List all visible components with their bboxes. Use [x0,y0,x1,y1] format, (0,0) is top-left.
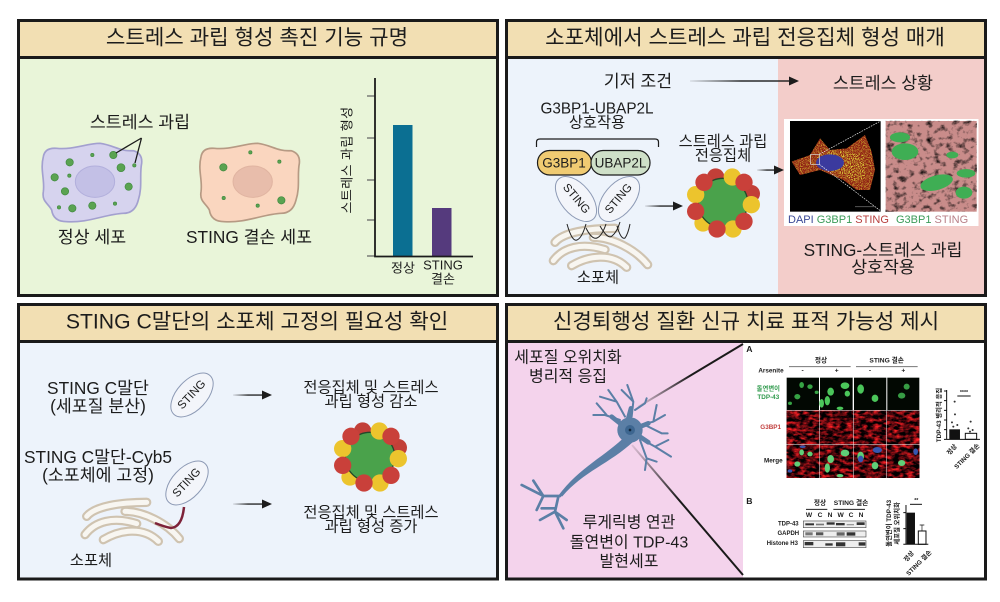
label: ALS mutant TDP-43 cells [570,514,688,570]
label: STING-deficient cell: STING 결손 세포 [186,227,312,247]
label: STING C-terminus cytosolic: (세포질 분산) [50,396,146,416]
arrow: lower [233,500,272,508]
label: pre-condensate: 스트레스 과립 [679,134,767,150]
heading: panel 1: 스트레스 과립 형성 촉진 기능 규명 [106,26,408,50]
icon: STING dimer: STING [560,182,592,216]
icon: anchored STING on ER: STING [171,466,203,500]
heading: panel 4 [506,304,986,342]
bar chart: stress granule formation: 정상 [391,260,415,276]
heading: panel 2 [506,20,986,58]
icon: anchored STING on ER [85,453,216,541]
bar chart: stress granule formation: 결손 [431,272,455,286]
label: ALS mutant TDP-43 cells: 돌연변이 TDP-43 [570,534,688,552]
label: cytoplasmic mislocalization: 병리적 응집 [529,368,607,386]
label: STING-stress granule interaction: STING-스트레스 과립 [804,240,962,260]
label: G3BP1-UBAP2L interaction: G3BP1-UBAP2L [540,100,654,118]
callout: stress granule pointer [90,112,190,163]
figure B: western blot: TDP-43 [778,521,799,527]
label: Cyb5 anchored: STING C말단-Cyb5 [24,447,172,467]
chart: cytoplasmic mislocalization [884,498,933,577]
label: ALS mutant TDP-43 cells: 발현세포 [600,552,658,570]
icon: STING ellipse: STING [176,378,208,412]
figure B: western blot: C [849,512,854,519]
heading: panel 1 [18,20,498,58]
arrow: dimer to condensate [645,202,683,210]
figure B: western blot: 정상 [814,498,826,507]
figure A: microscopy grid: 돌연변이 [757,383,780,392]
bar chart: stress granule formation [340,78,473,286]
icon: neuron [522,385,671,528]
label: ALS mutant TDP-43 cells: 루게릭병 연관 [583,514,676,532]
chart: TDP-43 aggregates: TDP-43 병리적 응집 [934,388,943,442]
label: cytoplasmic mislocalization [514,348,622,386]
arrow: condensate to image [757,166,784,174]
icon: ER membrane with anchors [553,222,648,267]
chart: TDP-43 aggregates: **** [960,390,969,396]
figure A: microscopy grid: STING 결손 [869,355,904,364]
figure A and B [746,344,981,577]
bar chart: stress granule formation: STING [423,258,463,272]
figure B: western blot: N [859,512,864,519]
figure B: western blot: C [818,512,823,519]
label: G3BP1-UBAP2L interaction [540,100,654,132]
label: STING C-terminus cytosolic: STING C말단 [47,378,149,398]
icon: G3BP1 and UBAP2L pills: UBAP2L [595,156,647,170]
chart: TDP-43 aggregates: STING 결손 [952,441,981,471]
label: pre-condensate: 전응집체 [695,148,751,164]
label: decreased formation: 전응집체 및 스트레스 [303,380,439,396]
chart: TDP-43 aggregates: 정상 [944,442,959,457]
icon: STING dimer [547,169,648,229]
label: STING-stress granule interaction [804,240,962,277]
heading: panel 3: STING C말단의 소포체 고정의 필요성 확인 [66,310,448,334]
figure B: western blot: N [828,512,833,519]
label: increased formation [303,504,439,536]
callout: stress granule pointer: 스트레스 과립 [90,112,190,132]
figure A: microscopy grid: Merge [764,457,783,464]
label: Cyb5 anchored [24,447,172,485]
chart: cytoplasmic mislocalization: STING 결손 [904,548,933,577]
label: STING C-terminus cytosolic [47,378,149,416]
figure B: western blot: GAPDH [778,531,799,537]
icon: STING dimer: STING [603,182,635,216]
chart: TDP-43 aggregates [934,388,981,471]
icon: G3BP1 and UBAP2L pills: G3BP1 [542,156,586,170]
panel: C-terminal ER anchoring [18,304,498,579]
label: increased formation: 전응집체 및 스트레스 [303,504,439,522]
bracket [536,139,658,147]
arrow: basal to stress [690,76,799,86]
label: pre-condensate [679,134,767,164]
panel: stress granule function [18,20,498,296]
panel: neurodegenerative target [506,304,986,579]
heading: panel 4: 신경퇴행성 질환 신규 치료 표적 가능성 제시 [553,310,939,334]
figure A: microscopy grid: TDP-43 [757,394,780,401]
label: cytoplasmic mislocalization: 세포질 오위치화 [514,348,622,366]
figure B: western blot: W [838,512,845,519]
figure A: microscopy grid: G3BP1 [760,424,782,431]
figure A: microscopy grid: Arsenite [758,367,784,374]
figure B: western blot: B [746,496,752,506]
label: STING-stress granule interaction: 상호작용 [851,257,915,277]
bar chart: stress granule formation: 스트레스 과립 형성 [340,107,354,213]
icon: G3BP1 and UBAP2L pills [538,150,650,175]
figure A: microscopy grid: + [901,367,905,374]
label: stress condition: 스트레스 상황 [833,73,933,93]
figure A: microscopy grid [746,344,919,478]
icon: STING-deficient cell [200,143,299,222]
label: ER: 소포체 [70,552,112,570]
figure A: microscopy grid: A [746,344,753,354]
icon: condensate [334,422,407,492]
label: ER: 소포체 [577,270,619,286]
figure A: microscopy grid: 정상 [815,355,827,364]
figure A: microscopy grid: + [835,367,839,374]
heading: panel 3 [18,304,498,342]
chart: cytoplasmic mislocalization: 세포질 오위치화 [892,502,901,545]
label: decreased formation: 과립 형성 감소 [325,394,417,410]
icon: STING ellipse [163,365,221,425]
arrow: upper [233,390,272,400]
label: normal cell: 정상 세포 [58,227,126,247]
label: Cyb5 anchored: (소포체에 고정) [42,465,154,485]
icon: condensate [687,168,760,238]
icon: normal cell [42,143,142,222]
figure B: western blot: STING 결손 [834,498,868,507]
chart: cytoplasmic mislocalization: 정상 [901,549,916,563]
chart: cytoplasmic mislocalization: ** [914,498,919,504]
figure B: western blot: W [806,512,813,519]
microscopy images: G3BP1 STING [896,214,968,226]
microscopy images: DAPI G3BP1 STING [788,214,889,226]
microscopy images [784,119,978,226]
zoom lines [632,344,743,575]
figure B: western blot: Histone H3 [767,541,799,547]
panel: pre-condensate formation [506,20,986,296]
label: basal condition: 기저 조건 [604,71,672,91]
figure A: microscopy grid: - [802,367,804,374]
label: decreased formation [303,380,439,410]
heading: panel 2: 소포체에서 스트레스 과립 전응집체 형성 매개 [545,26,945,50]
chart: cytoplasmic mislocalization: 돌연변이 TDP-43 [884,499,893,547]
label: G3BP1-UBAP2L interaction: 상호작용 [569,114,625,132]
label: increased formation: 과립 형성 증가 [325,518,417,536]
figure B: western blot [746,496,868,548]
figure A: microscopy grid: - [869,367,871,374]
